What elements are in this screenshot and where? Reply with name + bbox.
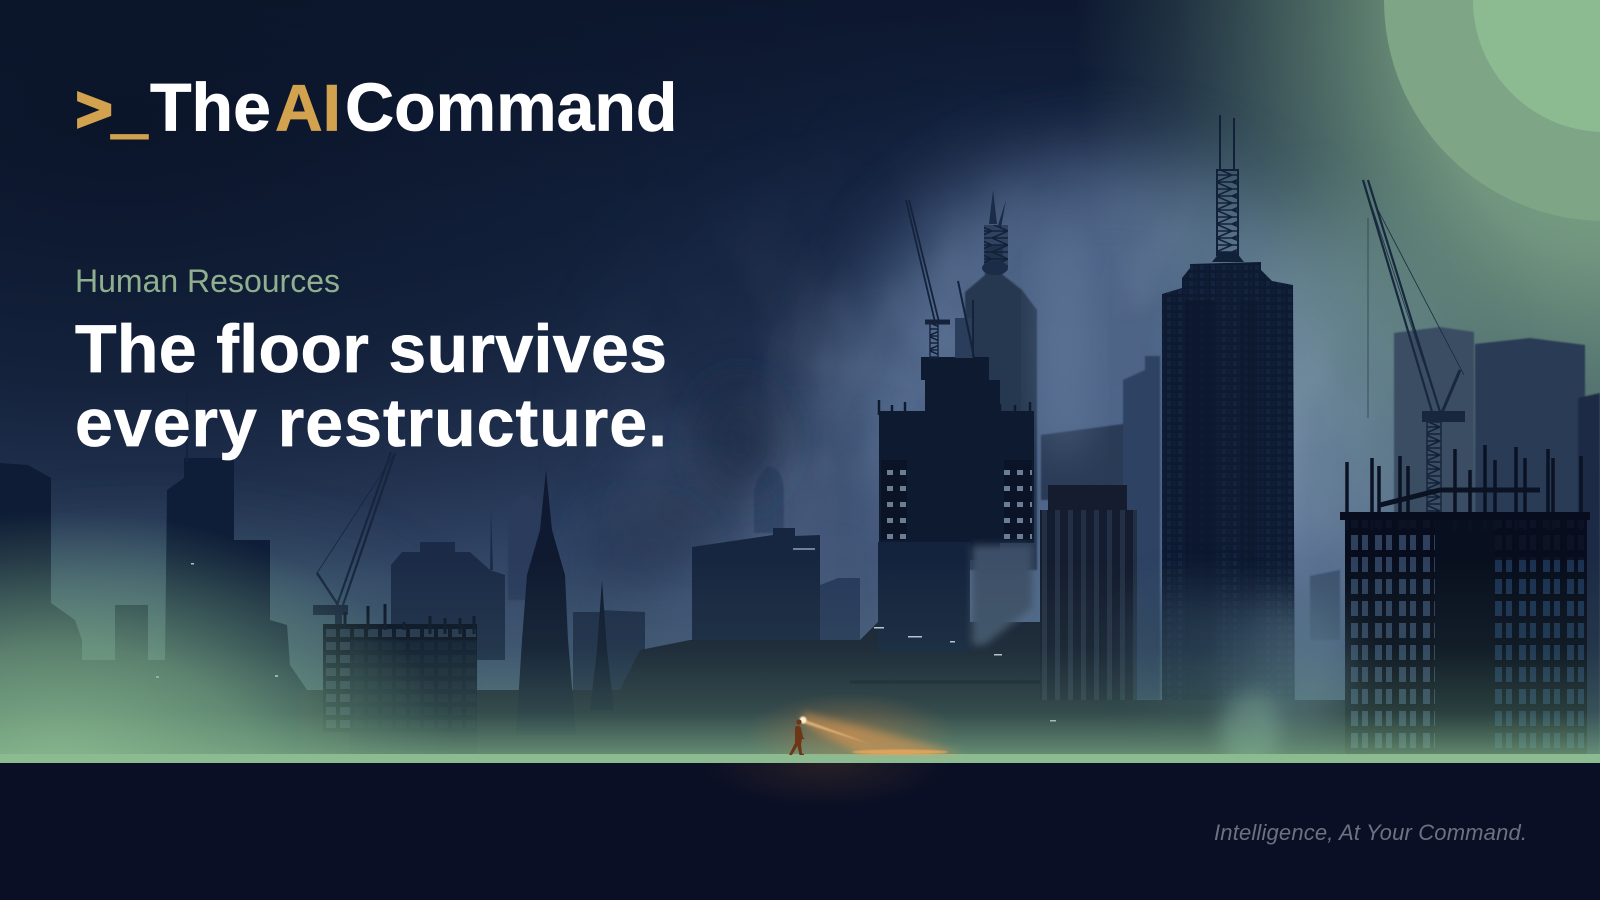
- tagline: Intelligence, At Your Command.: [1214, 820, 1527, 845]
- front dark building: [1040, 485, 1137, 700]
- scaffold floors: [879, 411, 1034, 543]
- spire crown: [982, 190, 1008, 275]
- twin antennae: [1220, 115, 1234, 170]
- far building: stepped tower behind scaffold: [965, 245, 1037, 570]
- cathedral spires: [516, 470, 614, 735]
- glow: green haze top right: [1000, 0, 1600, 720]
- icon: walking figure: [789, 719, 805, 755]
- logo: AI: [275, 70, 341, 144]
- low city: [300, 622, 1040, 756]
- building: stepped block: [391, 542, 505, 660]
- headline: every restructure.: [75, 385, 667, 461]
- ground fog: [0, 510, 1600, 755]
- lower block: [878, 542, 970, 652]
- central scaffold tower: [878, 190, 1034, 652]
- lattice mast: [1217, 170, 1238, 255]
- building: central-left block: [692, 528, 820, 700]
- low mist between towers: [1130, 590, 1345, 770]
- scaffold: right building: [1340, 445, 1590, 756]
- upper mast: [955, 318, 973, 358]
- logo: Command: [345, 70, 677, 146]
- headline: The floor survives: [75, 311, 667, 387]
- crane: right: [1363, 180, 1465, 514]
- building: left high-rise: [82, 458, 307, 756]
- far skyline silhouettes: [508, 245, 1600, 756]
- footer: dark floor panel: [0, 763, 1600, 900]
- light beam from walking figure: [745, 693, 965, 755]
- scaffold: left building: [323, 604, 477, 756]
- floor glow below figure: [690, 763, 970, 823]
- logo: >_: [76, 76, 148, 144]
- far pillars left of centre: [754, 466, 784, 533]
- circle: large soft disc top right: [1384, 0, 1600, 221]
- crane: left: [313, 452, 395, 652]
- base of skyline: [850, 700, 1345, 756]
- smoke plumes: [580, 220, 1087, 590]
- crane: central: [906, 200, 950, 358]
- category label: Human Resources: [75, 263, 340, 299]
- far building: mid block: [1041, 424, 1123, 500]
- building: far left tower: [0, 463, 82, 756]
- band: green horizon line: [0, 754, 1600, 763]
- far buildings: right pair: [1394, 327, 1474, 520]
- headline: [75, 311, 667, 461]
- main central skyscraper: [1162, 115, 1295, 756]
- left skyline: [0, 392, 1040, 756]
- far building: tall pale tower: [1123, 356, 1160, 700]
- circle: inner disc top right: [1473, 0, 1600, 132]
- city window lights: [156, 563, 1056, 722]
- tower core: [921, 357, 1000, 560]
- logo: The: [150, 70, 271, 146]
